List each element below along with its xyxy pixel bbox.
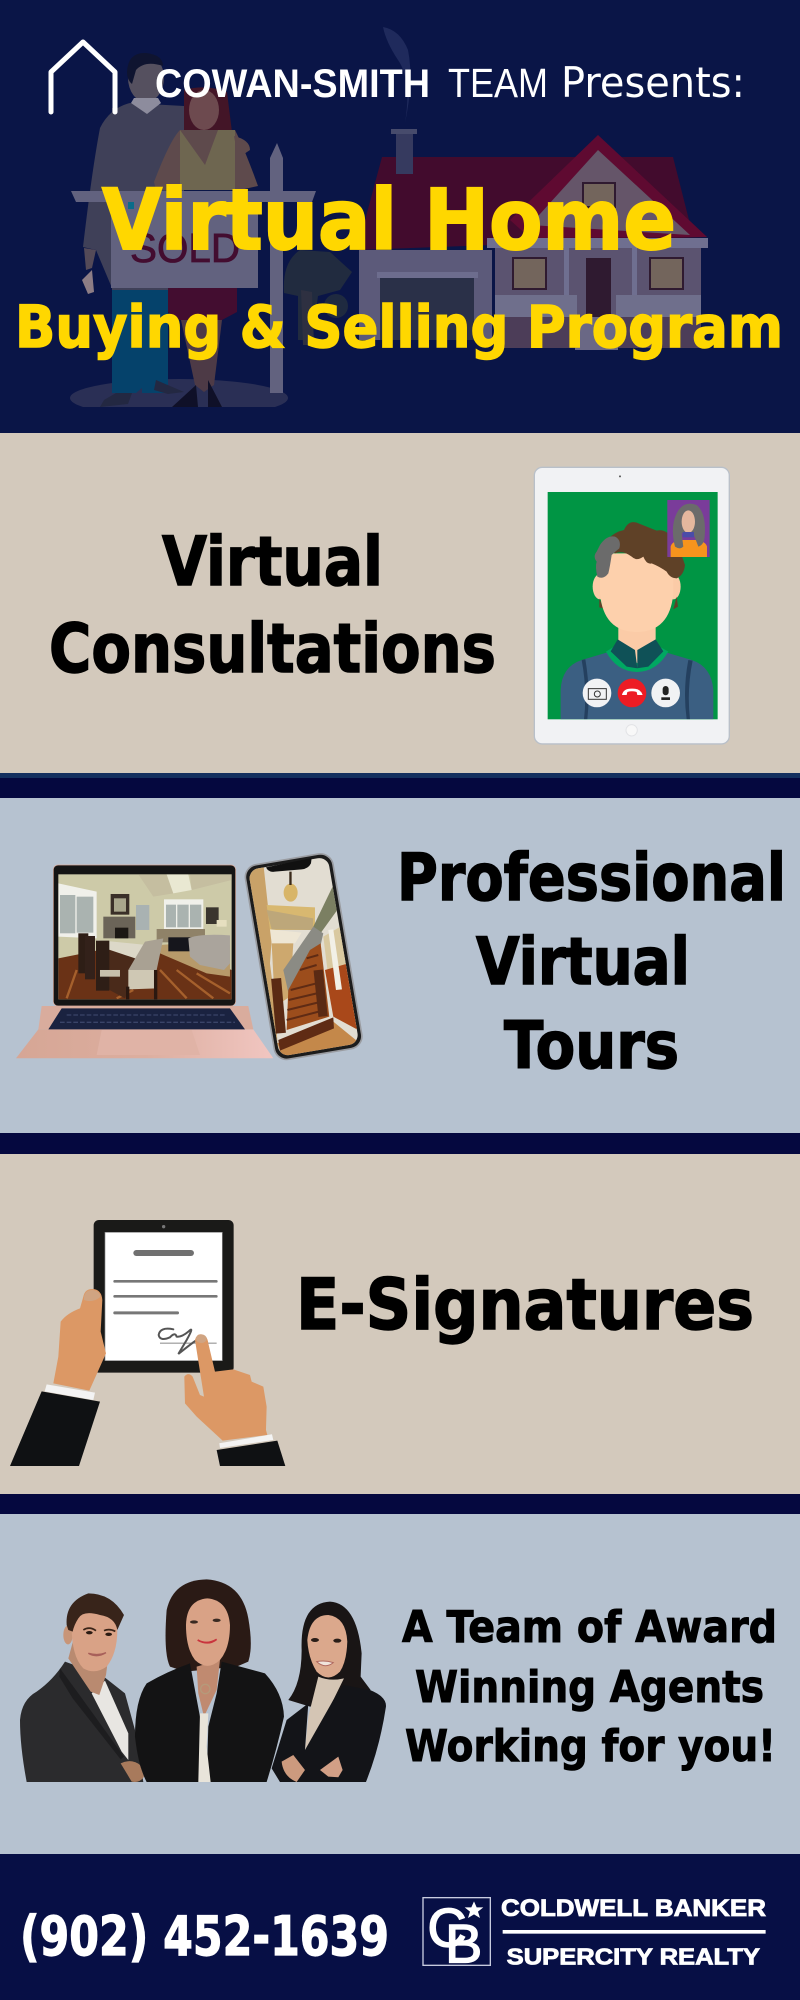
logo: Coldwell Banker Supercity Realty (423, 1895, 766, 1975)
panel: footer (0, 1854, 800, 2000)
heading: Virtual Consultations: Virtual (162, 523, 383, 602)
icon: house outline logo (51, 42, 115, 112)
icon: hands signing on tablet (10, 1220, 285, 1466)
icon: smartphone showing staircase (244, 853, 363, 1060)
logo: Coldwell Banker Supercity Realty: SUPERCITY REALTY (507, 1943, 760, 1969)
header background illustration: couple with sold sign (70, 53, 352, 417)
logo: Coldwell Banker Supercity Realty: C (427, 1897, 467, 1959)
panel: virtual consultations (0, 433, 800, 778)
heading: Virtual Consultations: Consultations (49, 610, 496, 689)
woman centre (135, 1579, 284, 1782)
heading: Virtual Consultations (49, 523, 496, 689)
heading: Professional Virtual Tours (397, 841, 786, 1084)
heading: Professional Virtual Tours: Tours (504, 1009, 679, 1084)
panel: header (0, 0, 800, 433)
panel: team of agents (0, 1514, 800, 1854)
logo: Coldwell Banker Supercity Realty: COLDWELL BANKER (501, 1895, 766, 1922)
brand line (155, 58, 745, 107)
team description text: Winning Agents (415, 1662, 764, 1713)
logo: Coldwell Banker Supercity Realty: B (445, 1913, 482, 1975)
panel: e-signatures (0, 1154, 800, 1494)
man (20, 1593, 144, 1782)
icon: tablet video call (534, 467, 729, 744)
brand line: TEAM (448, 60, 548, 106)
phone number: (902) 452-1639 (20, 1905, 389, 1968)
header background illustration: house (357, 27, 708, 350)
title: Virtual Home: Virtual Home (102, 171, 676, 269)
woman right (272, 1602, 386, 1782)
heading: Professional Virtual Tours: Virtual (476, 925, 690, 1000)
team description text (402, 1602, 777, 1772)
panel: professional virtual tours (0, 798, 800, 1133)
icon: laptop showing living room (16, 865, 273, 1058)
brand line: COWAN-SMITH (155, 62, 430, 106)
heading: E-Signatures: E-Signatures (296, 1264, 754, 1346)
photo: team of three agents (20, 1579, 386, 1782)
SOLD sign lettering: SOLD (130, 225, 240, 271)
brand line: Presents: (561, 58, 745, 107)
